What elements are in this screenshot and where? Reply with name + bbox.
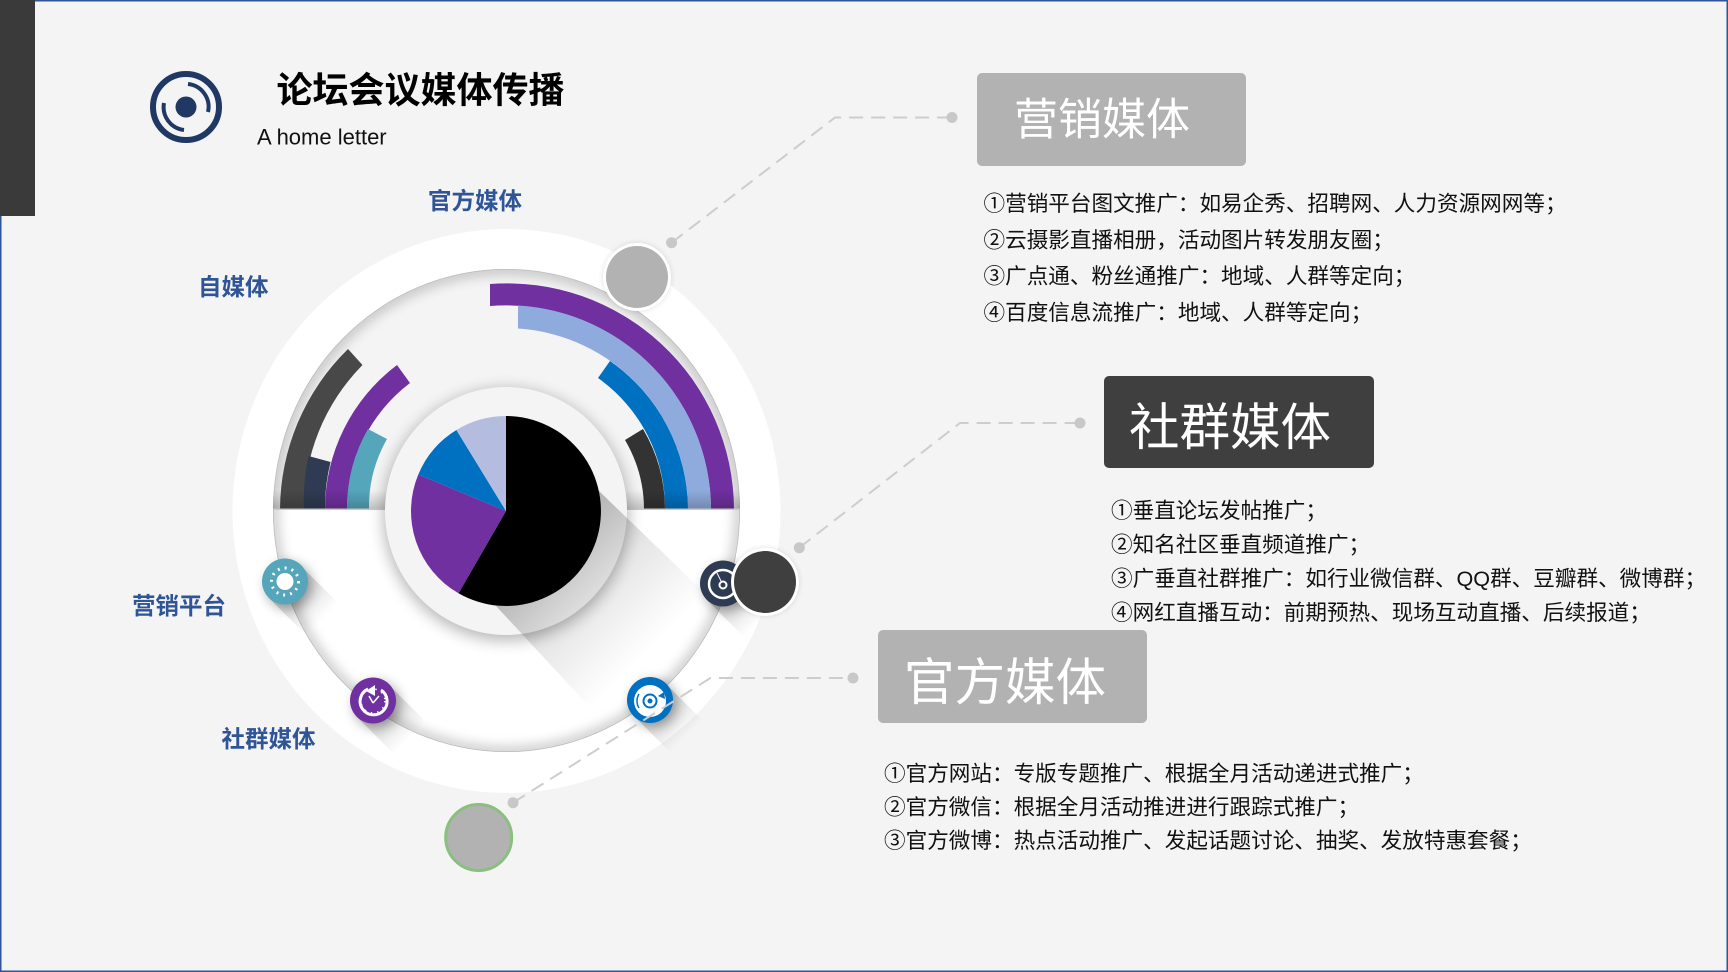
text block: official list [884,761,1532,853]
panel: marketing media [977,73,1567,325]
connector: official [508,672,858,808]
icon: clock [350,678,435,763]
text block: official list: ③官方微博：热点活动推广、发起话题讨论、抽奖、发放特惠套餐； [884,828,1532,853]
connector: community [794,418,1086,553]
arc: teal left [347,429,387,510]
outer white ring [232,229,780,793]
text block: community list [1111,498,1706,625]
node: green outlined bottom [446,804,512,870]
text block: marketing list: ③广点通、粉丝通推广：地域、人群等定向； [984,264,1415,288]
center disc shadow [384,390,628,640]
arc: light blue right [518,306,711,510]
icon: sun [262,558,347,644]
dark side bar [0,0,35,216]
label: community media: 社群媒体 [222,726,316,752]
text block: community list: ③广垂直社群推广：如行业微信群、QQ群、豆瓣群、微博群； [1111,566,1706,591]
node: gray top [603,243,671,311]
arc: dark right [625,429,665,510]
long shadow of pie [496,490,686,688]
panel: official media [878,630,1532,853]
heading box: official media [878,630,1147,723]
text block: marketing list: ①营销平台图文推广：如易企秀、招聘网、人力资源网网等； [984,191,1567,216]
text block: community list: ②知名社区垂直频道推广； [1111,532,1370,557]
icon: gauge [700,560,785,646]
label: official media: 官方媒体 [428,187,522,214]
radial diagram [232,229,799,870]
pie chart [411,416,601,606]
arc: navy left [304,456,331,510]
text block: marketing list: ④百度信息流推广：地域、人群等定向； [984,300,1372,325]
label: marketing platform: 营销平台 [132,592,226,619]
heading box: marketing media [977,73,1246,166]
logo icon [153,74,219,140]
node: dark right [731,548,799,616]
text block: community list: ④网红直播互动：前期预热、现场互动直播、后续报道； [1111,600,1651,625]
label: self media: 自媒体 [198,274,269,300]
text block: marketing list: ②云摄影直播相册，活动图片转发朋友圈； [984,228,1394,252]
arc: purple outer right [490,283,734,510]
heading box: marketing media: 营销媒体 [1014,96,1190,144]
arc: gray left [280,349,362,510]
text block: marketing list [984,191,1567,325]
subtitle: A home letter [257,124,387,150]
arc: blue right [598,361,688,510]
heading box: community media: 社群媒体 [1129,399,1331,456]
heading box: official media: 官方媒体 [904,654,1106,711]
text block: community list: ①垂直论坛发帖推广； [1111,498,1327,523]
text block: official list: ②官方微信：根据全月活动推进进行跟踪式推广； [884,794,1359,820]
panel: community media [1104,376,1706,625]
inner dish [270,265,745,759]
icon: disc [627,677,712,762]
connector: marketing [666,112,958,248]
arc: purple left [325,365,410,510]
text block: official list: ①官方网站：专版专题推广、根据全月活动递进式推广； [884,761,1424,786]
center disc [385,387,627,635]
heading box: community media [1104,376,1374,468]
title: 论坛会议媒体传播 [276,70,565,110]
